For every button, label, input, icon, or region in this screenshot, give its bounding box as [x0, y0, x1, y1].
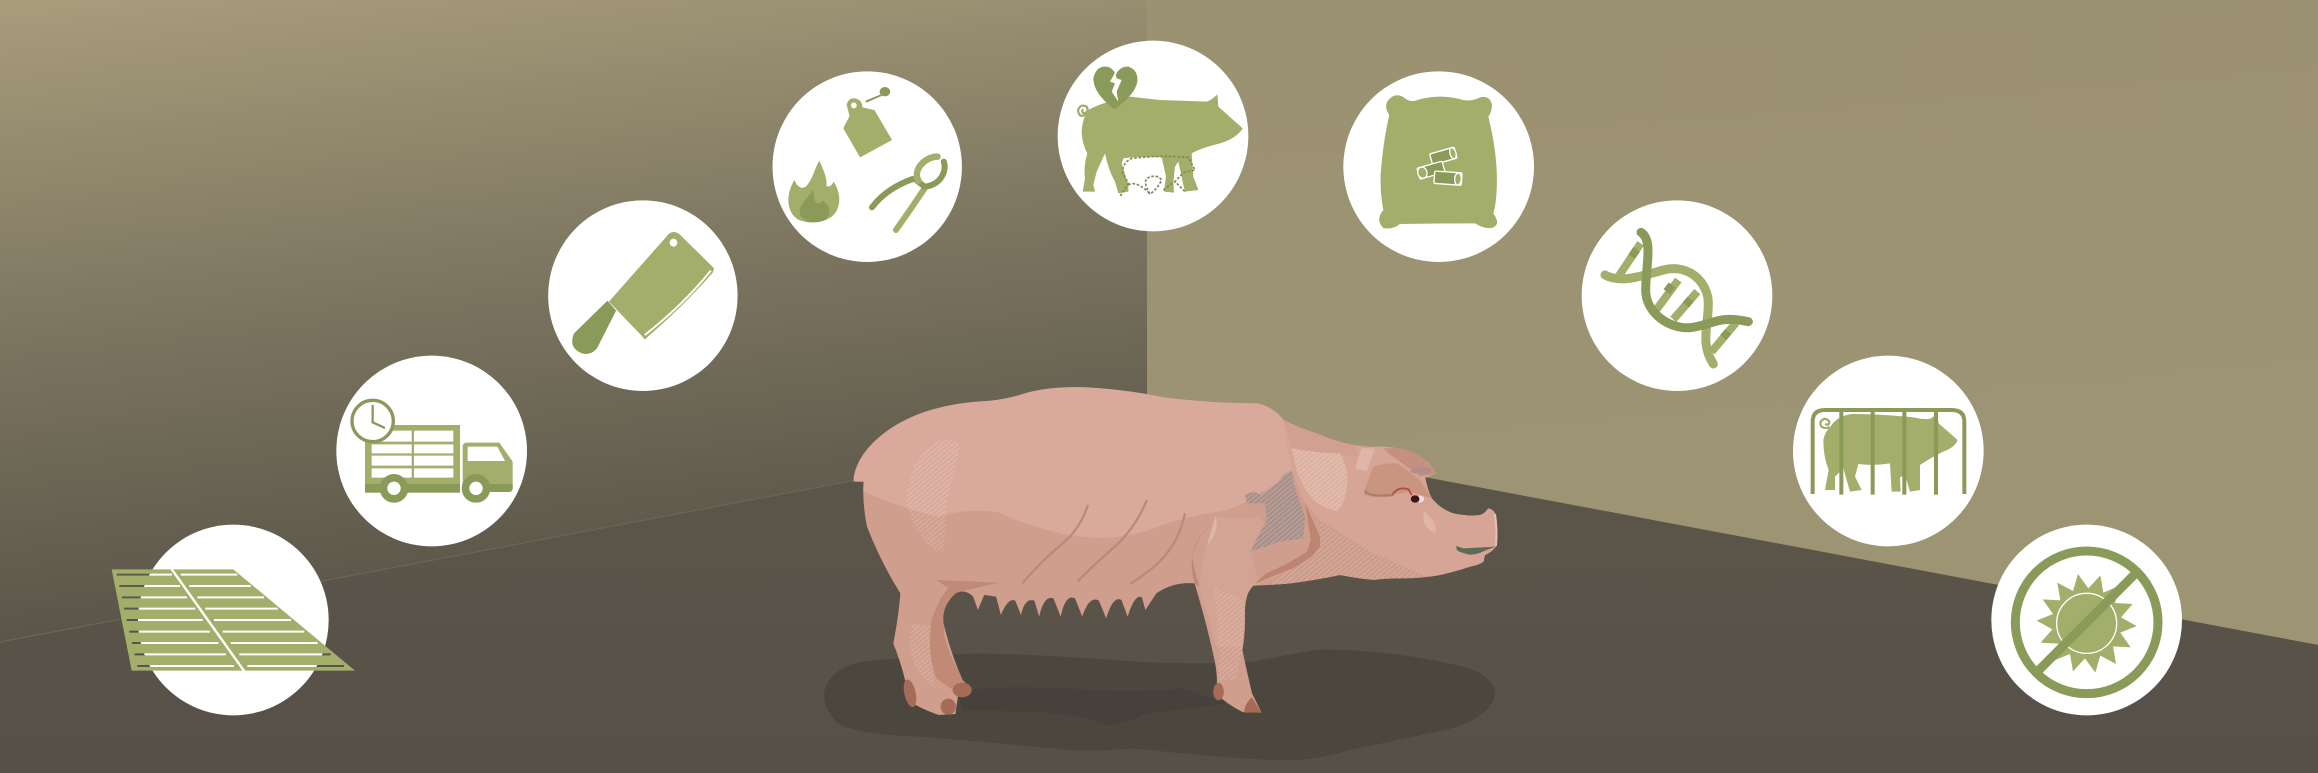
sow tail [1078, 106, 1088, 116]
ear back [1384, 448, 1437, 477]
upper body [843, 380, 1293, 538]
icon circle: tag, flame and pliers [773, 71, 962, 262]
neck shade [1284, 420, 1357, 457]
icon circle: DNA helix [1582, 200, 1772, 391]
piglet outlines [1120, 156, 1195, 196]
rear wheel [380, 474, 408, 503]
floor shadow [824, 649, 1495, 760]
rump hatch [906, 439, 960, 551]
icon circle: truck and clock [336, 356, 527, 546]
white circle [773, 71, 962, 262]
white circle [1582, 200, 1772, 391]
cleaver hole [670, 239, 677, 247]
front wheel [462, 474, 490, 503]
rear leg hatch [910, 623, 934, 687]
shoulder [1244, 586, 1256, 616]
flame core [800, 189, 830, 222]
snout highlight [1495, 514, 1496, 546]
head and neck [1294, 424, 1496, 576]
front leg crease [1192, 528, 1208, 586]
cleaver edge [645, 271, 711, 335]
grey patch hatch [1245, 470, 1305, 552]
truck cargo frame [365, 425, 460, 493]
light strand [1605, 269, 1713, 364]
sun disc [2057, 593, 2117, 653]
eye [1411, 495, 1424, 503]
sow silhouette [1082, 94, 1243, 193]
light rungs [1618, 243, 1736, 352]
white circle [1991, 525, 2182, 715]
white circle [336, 356, 527, 546]
cage [1813, 410, 1964, 495]
cheek highlight [1423, 512, 1436, 533]
broken heart [1093, 67, 1137, 109]
jaw hatch [1265, 520, 1427, 587]
icon circle: sow, broken heart and piglets [1058, 41, 1248, 231]
sun rays [2037, 574, 2137, 673]
brow line [1393, 488, 1412, 495]
icon circle: feed sack [1343, 71, 1534, 262]
rear leg crease [930, 580, 999, 690]
hooves [902, 679, 1262, 715]
heart crack [1110, 73, 1122, 102]
jaw hatch base [1268, 575, 1364, 585]
grey patch [1245, 470, 1305, 552]
truck chassis band [365, 484, 513, 493]
icon circle: caged pig [1793, 356, 1984, 546]
icon circle: cleaver [548, 200, 738, 391]
rung accents [1632, 249, 1728, 337]
shoulder highlight [1207, 517, 1217, 547]
ear tag [843, 98, 892, 157]
ear smudge [1410, 467, 1431, 474]
tag pin [866, 87, 890, 102]
cleaver handle [572, 301, 616, 354]
ear highlight [1355, 448, 1375, 472]
front leg hatch [1214, 587, 1245, 680]
sack [1379, 95, 1497, 228]
left wall [0, 0, 1147, 642]
icon circle: slatted floor [112, 525, 355, 715]
white circle [1793, 356, 1984, 546]
pig tail [1821, 419, 1830, 428]
floor [0, 425, 2318, 773]
pellets [1416, 147, 1462, 185]
wrinkles [1022, 500, 1185, 584]
pig silhouette [1823, 414, 1958, 492]
white circle [1058, 41, 1248, 231]
white circle [138, 525, 329, 715]
icon circle: no sunlight [1991, 525, 2182, 715]
slats [112, 569, 355, 671]
prohibition sign [2015, 551, 2158, 694]
mouth [1456, 546, 1496, 555]
flame [788, 161, 839, 222]
shadow core [958, 687, 1226, 725]
pig body clipped shading [843, 380, 1508, 720]
cleaver blade [609, 232, 714, 339]
neck blotch [1292, 448, 1348, 512]
white circle [548, 200, 738, 391]
wall and floor seam [0, 425, 1147, 642]
neck hatch [1292, 448, 1348, 512]
clock [352, 400, 393, 442]
ear flap [1364, 463, 1432, 498]
ear flap edge [1365, 491, 1394, 496]
dark strand [1641, 232, 1748, 328]
lower body [843, 380, 1508, 720]
collar crease [1254, 503, 1320, 584]
pig with shadow [824, 380, 1508, 760]
right wall [1147, 0, 2318, 645]
pliers [872, 157, 945, 230]
truck cab [463, 443, 513, 492]
white circle [1343, 71, 1534, 262]
